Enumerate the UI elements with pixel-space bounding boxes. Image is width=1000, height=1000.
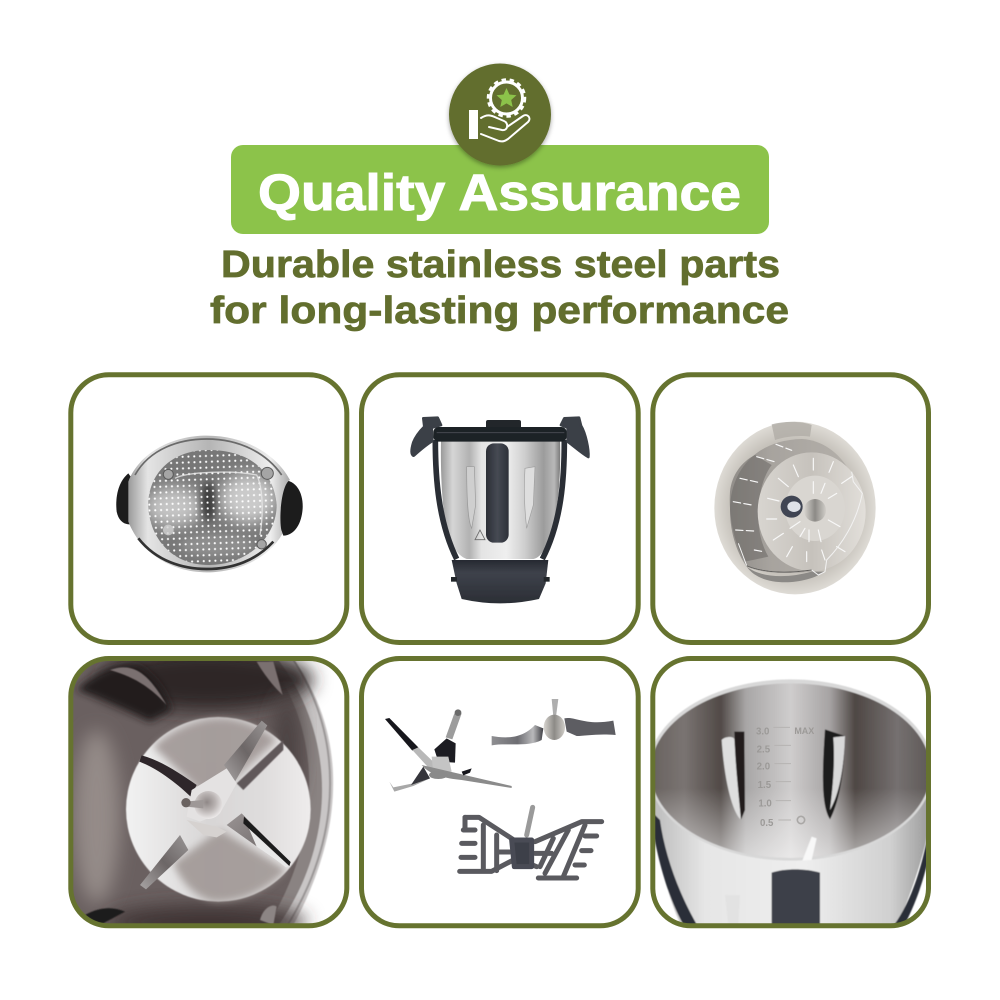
bright bowl floor (126, 717, 311, 902)
icon badge (449, 64, 551, 166)
black fold in bowl wall (77, 665, 172, 722)
panel: steel strainer disc (653, 375, 928, 642)
panel frame (71, 375, 347, 642)
panel frame (362, 375, 638, 642)
product: bowl interior with blade (73, 661, 334, 924)
title banner (231, 145, 769, 234)
panel: steamer tray (71, 375, 347, 642)
kneading blade (492, 699, 616, 745)
measurement markings: 0.5 (760, 818, 774, 829)
panel: bowl with handle (362, 375, 638, 642)
infographic canvas (68, 62, 931, 928)
panel: blade inside bowl (60, 650, 347, 938)
product: round strainer basket (714, 422, 876, 594)
icon: open hand (469, 110, 529, 141)
cross blade (385, 709, 512, 792)
icon: gear with star (488, 80, 525, 116)
panel: blade attachments (362, 658, 638, 926)
panel frame (71, 658, 347, 926)
panel: bowl interior with measurement marks (648, 658, 934, 937)
measurement markings (756, 726, 814, 829)
subtitle (210, 244, 789, 332)
measurement markings: 3.0 (756, 727, 769, 738)
product: bowl interior (655, 679, 926, 924)
measurement markings: MAX (794, 726, 814, 736)
whisk blade (460, 807, 602, 878)
panel frame (653, 658, 928, 926)
product: mixing bowl (412, 418, 588, 603)
product: perforated steamer tray (116, 436, 303, 572)
subtitle: Durable stainless steel parts (221, 244, 780, 286)
subtitle: for long-lasting performance (210, 290, 789, 332)
product: blade attachments (385, 699, 616, 878)
measurement markings: 1.0 (758, 799, 772, 810)
measurement markings: 2.0 (757, 762, 770, 773)
panel frame (362, 658, 638, 926)
measurement markings: 1.5 (758, 780, 772, 791)
four-arm blade (139, 721, 291, 889)
panel frame (653, 375, 928, 642)
title text: Quality Assurance (258, 164, 741, 221)
measurement markings: 2.5 (757, 744, 771, 755)
